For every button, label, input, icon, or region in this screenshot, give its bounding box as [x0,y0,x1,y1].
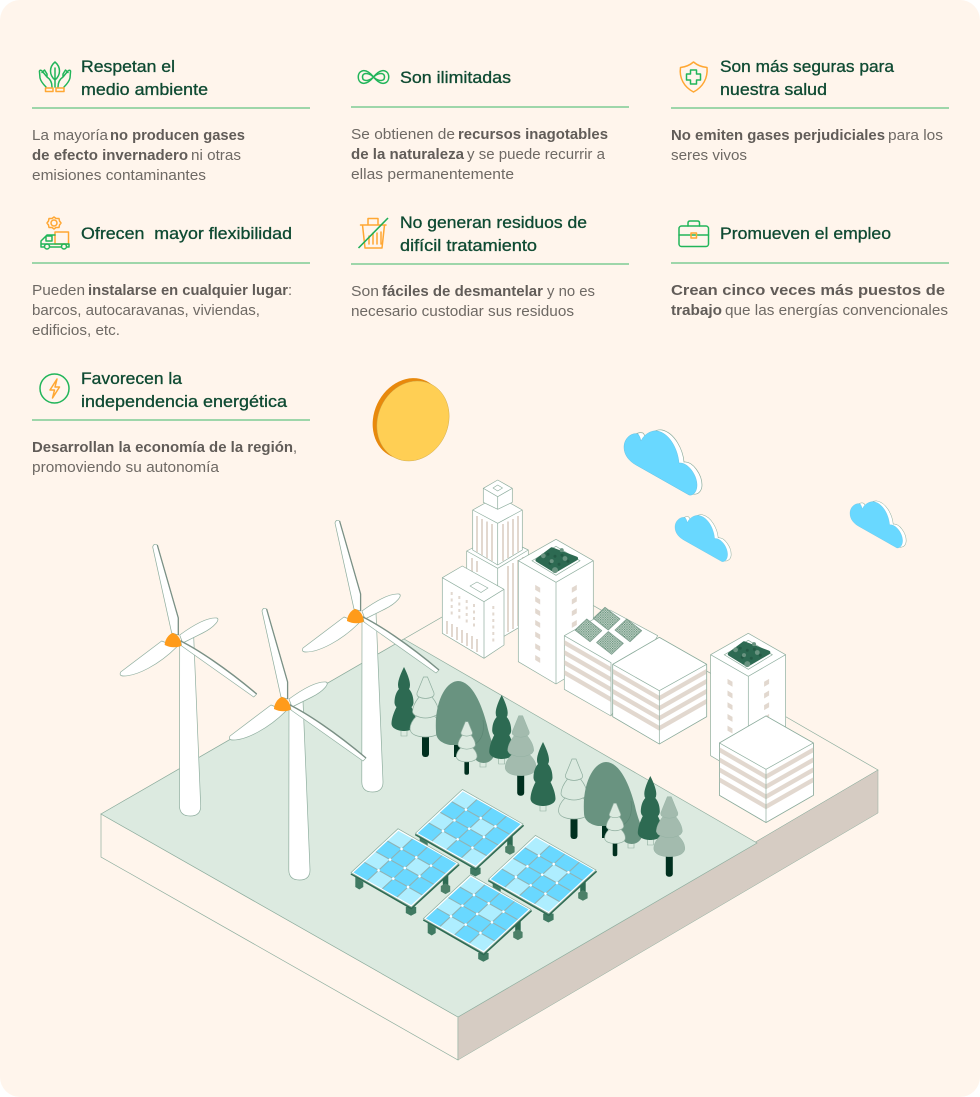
body text: y se puede recurrir a [467,147,606,163]
sun [360,366,462,473]
body text: ellas permanentemente [351,167,514,183]
heading: nuestra salud [720,81,827,99]
body text: La mayoría [32,128,109,144]
heading [720,58,895,99]
panel: promueven el empleo [671,221,949,319]
body text: Son [351,284,379,300]
body text [671,283,948,319]
body text: Se obtienen de [351,127,455,143]
heading: Favorecen la [81,370,183,388]
tall building with green roof [711,633,786,778]
tower [467,480,528,640]
heading [81,58,208,99]
clouds [624,430,906,562]
heading: Son ilimitadas [400,69,511,87]
body text: Desarrollan la economía de la región [32,440,293,456]
small office building [442,566,504,658]
tall building with green roof [518,539,593,684]
body text: edificios, etc. [32,323,120,339]
heading: Ofrecen mayor flexibilidad [81,225,292,243]
solar panels [351,789,596,962]
heading: difícil tratamiento [400,237,537,255]
heading: Son más seguras para [720,58,895,76]
body text: de la naturaleza [351,147,465,163]
body text: de efecto invernadero [32,148,188,164]
body text [32,283,292,339]
body text: barcos, autocaravanas, viviendas, [32,303,260,319]
body text: ni otras [191,148,241,164]
panel: mayor flexibilidad [32,217,310,339]
city buildings [442,480,813,823]
panel: son más seguras [671,58,949,164]
body text: que las energías convencionales [725,303,948,319]
forest [392,667,685,877]
body text [671,128,943,164]
body text: promoviendo su autonomía [32,460,220,476]
body text: necesario custodiar sus residuos [351,304,574,320]
striped building [719,716,813,823]
body text [32,440,297,476]
body text: para los [888,128,943,144]
body text: recursos inagotables [458,127,608,143]
icon: truck with gear [41,217,69,249]
icon: energy bolt in circle [40,374,69,403]
wind turbines [120,520,439,880]
striped building with solar roof [564,607,658,716]
body text [351,127,608,183]
body text: Crean cinco veces más puestos de [671,283,945,299]
striped building [613,637,707,744]
body text [351,284,595,320]
isometric platform [101,568,878,1060]
icon: shield with cross [680,62,707,92]
body text: instalarse en cualquier lugar [88,283,288,299]
heading: medio ambiente [81,81,208,99]
panel: no generan residuos [351,214,629,320]
heading [81,370,288,411]
icon: hands holding a leaf [39,62,71,92]
body text: emisiones contaminantes [32,168,206,184]
body text: Pueden [32,283,85,299]
body text: fáciles de desmantelar [382,284,543,300]
icon: briefcase [679,221,708,246]
body text: No emiten gases perjudiciales [671,128,885,144]
icon: infinity [358,71,389,83]
body text [32,128,245,184]
heading: No generan residuos de [400,214,587,232]
body text: trabajo [671,303,722,319]
heading: Promueven el empleo [720,225,891,243]
heading: independencia energética [81,393,288,411]
body text: seres vivos [671,148,747,164]
body text: : [288,283,292,299]
body text: y no es [547,284,595,300]
icon: crossed-out bin [358,218,388,248]
panel: independencia energética [32,370,310,476]
panel: respetan el medio ambiente [32,58,310,184]
body text: no producen gases [110,128,245,144]
heading: Respetan el [81,58,175,76]
heading [400,214,587,255]
body text: , [293,440,297,456]
panel: son ilimitadas [351,69,629,183]
